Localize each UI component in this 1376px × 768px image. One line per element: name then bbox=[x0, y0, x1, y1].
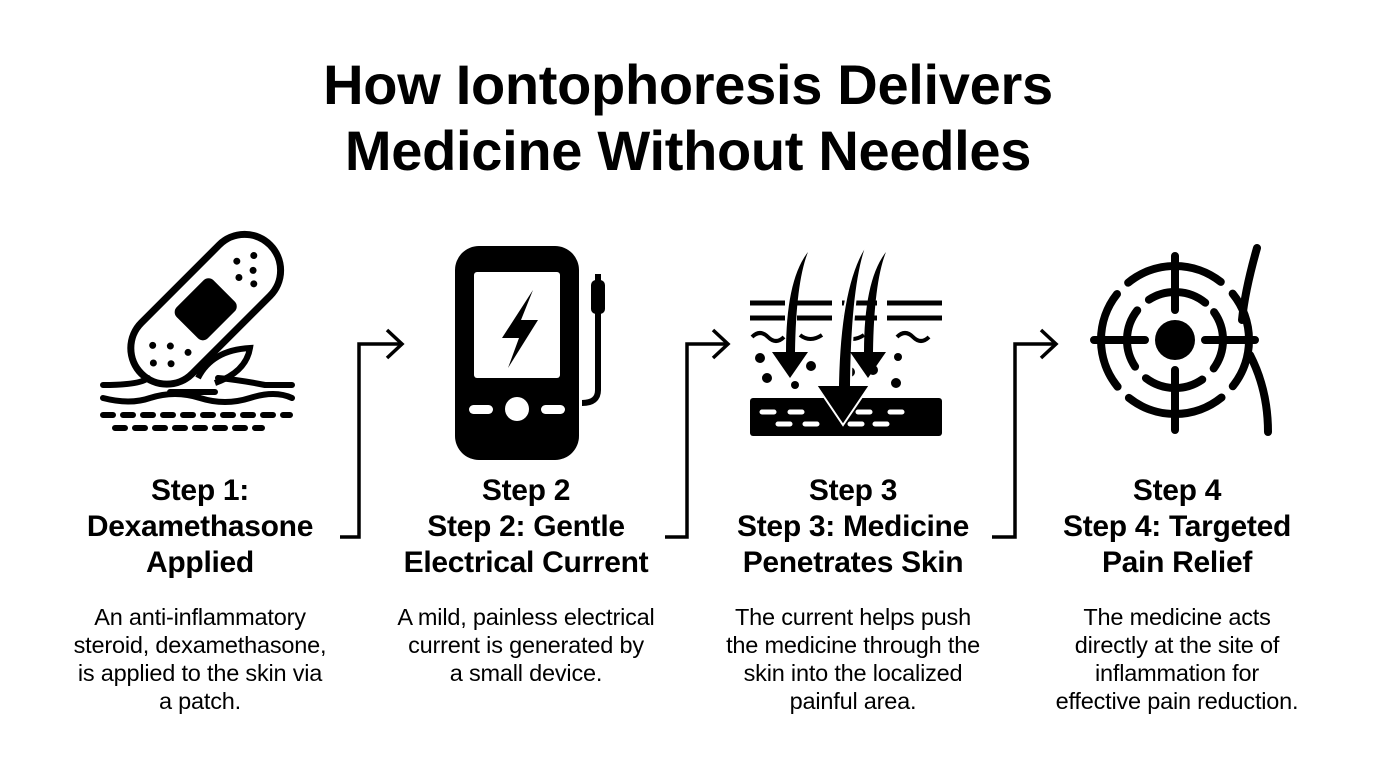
step 3 text: the medicine through the bbox=[726, 632, 980, 658]
step 4 text: The medicine acts bbox=[1083, 604, 1271, 630]
step 1 text: steroid, dexamethasone, bbox=[74, 632, 326, 658]
step 4 heading: Step 4: Targeted bbox=[1063, 510, 1291, 543]
step 1 text: An anti-inflammatory bbox=[94, 604, 306, 630]
step 3 text: The current helps push bbox=[735, 604, 971, 630]
step 4 heading: Step 4 bbox=[1133, 474, 1221, 507]
step 2 heading: Step 2 bbox=[482, 474, 570, 507]
title bbox=[323, 53, 1053, 182]
step 3 heading: Penetrates Skin bbox=[743, 546, 963, 579]
step 2 text bbox=[397, 604, 655, 686]
step 1 text: a patch. bbox=[159, 688, 241, 714]
icon: bandage patch on skin bbox=[103, 219, 296, 428]
step 4 text: effective pain reduction. bbox=[1056, 688, 1298, 714]
step 1 heading bbox=[87, 474, 313, 579]
icon: medicine penetrating skin bbox=[750, 242, 942, 436]
step 4 heading bbox=[1063, 474, 1291, 579]
step 1 heading: Dexamethasone bbox=[87, 510, 313, 543]
step 4 heading: Pain Relief bbox=[1102, 546, 1252, 579]
step 1 heading: Applied bbox=[146, 546, 254, 579]
step 1 text: is applied to the skin via bbox=[78, 660, 322, 686]
step 2 text: A mild, painless electrical bbox=[397, 604, 655, 630]
step 4 text: inflammation for bbox=[1095, 660, 1259, 686]
arrow: step3 to step4 bbox=[992, 330, 1056, 537]
step 2 text: current is generated by bbox=[408, 632, 644, 658]
step 3 heading: Step 3: Medicine bbox=[737, 510, 969, 543]
step 2 text: a small device. bbox=[450, 660, 602, 686]
step 2 heading: Electrical Current bbox=[404, 546, 648, 579]
arrow: step1 to step2 bbox=[340, 330, 402, 537]
step 3 text: skin into the localized bbox=[744, 660, 962, 686]
icon: target pain relief bbox=[1070, 235, 1280, 445]
step 2 heading bbox=[404, 474, 648, 579]
step 1 heading: Step 1: bbox=[151, 474, 249, 507]
step 1 text bbox=[74, 604, 326, 714]
title: Medicine Without Needles bbox=[345, 119, 1031, 182]
title: How Iontophoresis Delivers bbox=[323, 53, 1053, 116]
step 3 heading bbox=[737, 474, 969, 579]
step 3 text bbox=[726, 604, 980, 714]
step 2 heading: Step 2: Gentle bbox=[427, 510, 625, 543]
step 4 text: directly at the site of bbox=[1075, 632, 1279, 658]
step 4 text bbox=[1056, 604, 1298, 714]
icon: electrical device bbox=[455, 246, 605, 460]
arrow: step2 to step3 bbox=[665, 330, 728, 537]
step 3 heading: Step 3 bbox=[809, 474, 897, 507]
step 3 text: painful area. bbox=[790, 688, 916, 714]
